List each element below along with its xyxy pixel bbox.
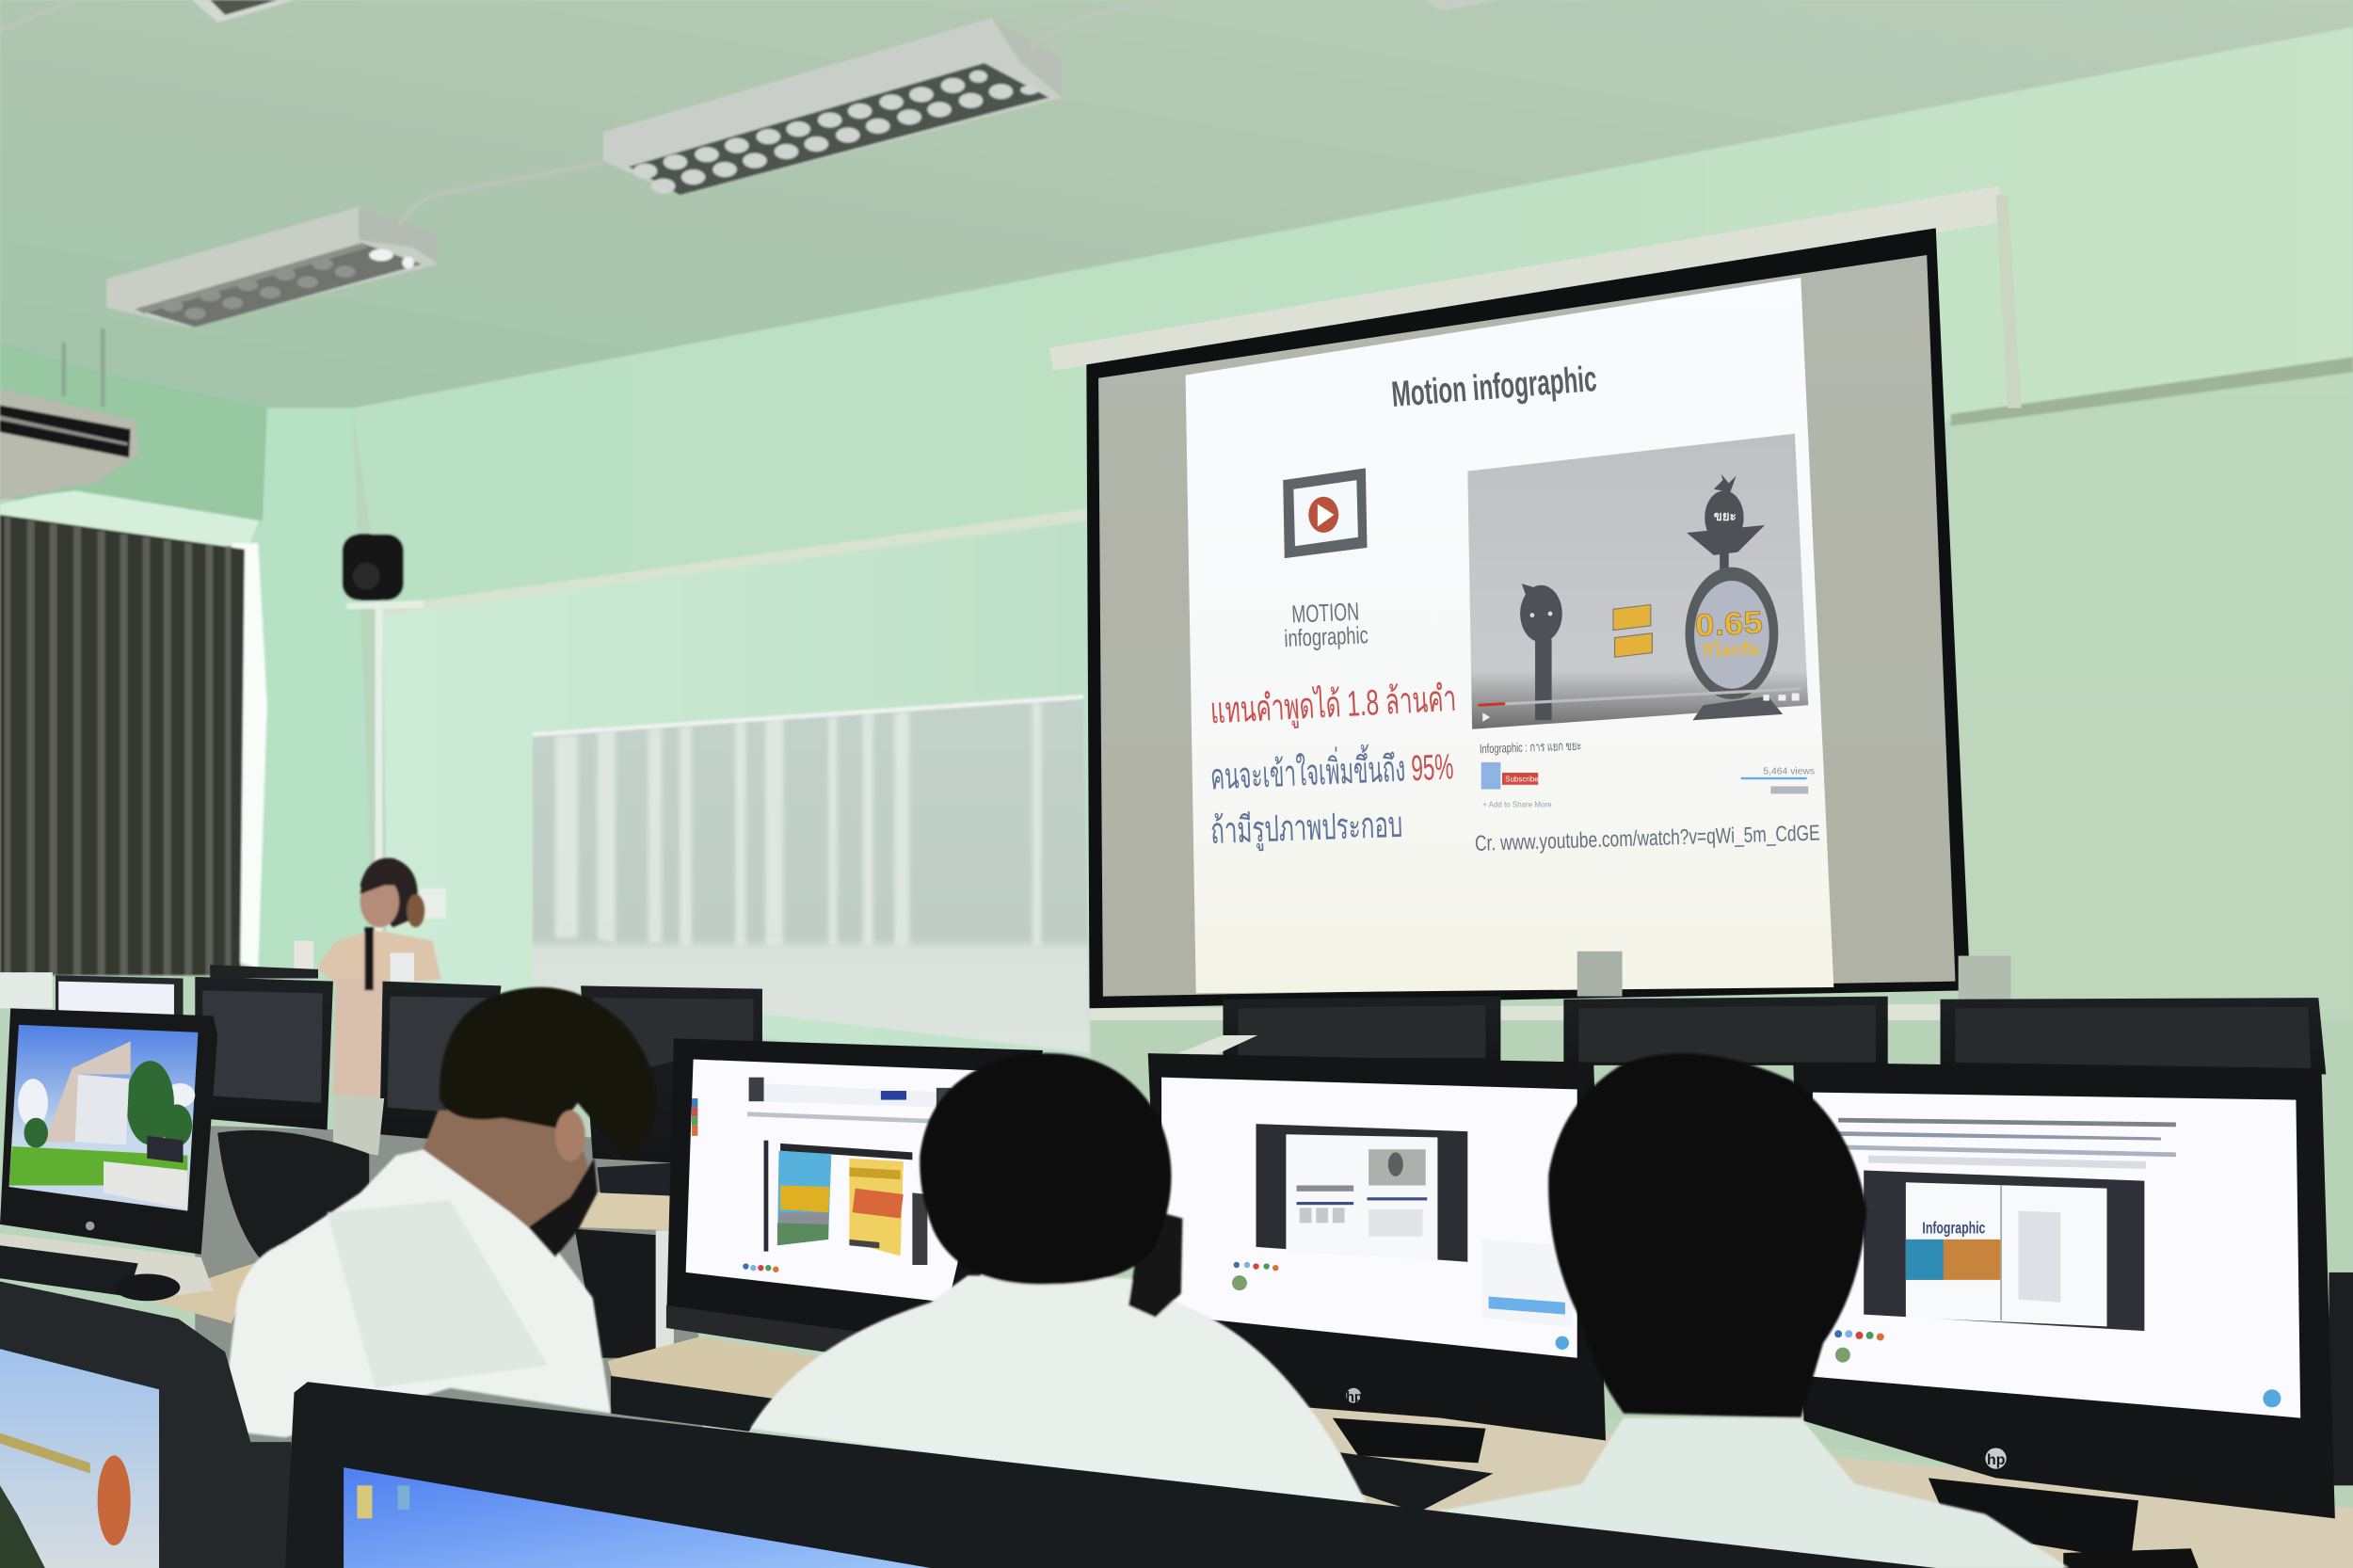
air conditioner (0, 328, 139, 500)
credit url: Cr. www.youtube.com/watch?v=qWi_5m_CdGE (1475, 820, 1820, 856)
speaker (343, 535, 424, 609)
scale with bag: 0.65 (1694, 605, 1764, 644)
video meta: 5,464 views (1763, 767, 1815, 777)
projector screen (1048, 186, 2318, 1020)
motion label: MOTION (1291, 598, 1360, 629)
thai text line 3: ถ้ามีรูปภาพประกอบ (1209, 805, 1403, 853)
monitor centre right (1148, 1053, 1606, 1440)
name card (391, 952, 414, 982)
curtain (0, 515, 245, 975)
student right (1418, 1053, 2070, 1568)
lower right wall (1951, 363, 2353, 1515)
video meta: Infographic : การ แยก ขยะ (1480, 739, 1582, 756)
motion label: infographic (1284, 622, 1369, 652)
screen housing (1048, 186, 2005, 371)
ceiling (0, 0, 2353, 408)
motion label (1284, 598, 1369, 652)
icon: video play (1283, 468, 1367, 558)
desk centre (608, 1336, 820, 1426)
monitor centre right: hp (1346, 1390, 1363, 1405)
pale cabinet side (656, 1230, 674, 1351)
space under presenter (333, 1098, 384, 1156)
paper clips on screen bottom (1577, 952, 1623, 997)
lower front wall (383, 513, 1093, 1080)
hp logo 4 (1985, 1448, 2007, 1469)
hair (360, 858, 418, 927)
video meta: Subscribe (1505, 776, 1539, 784)
hair bun (407, 894, 424, 927)
keyboard centre (611, 1376, 773, 1432)
far row monitors (0, 965, 762, 1163)
bright window strip (232, 543, 267, 968)
wall rail right (1951, 357, 2353, 426)
monitor stand (1333, 1418, 1485, 1463)
microphone (364, 927, 374, 990)
jacket (316, 930, 441, 985)
shirt (750, 1275, 1371, 1514)
dark pc cabinet (575, 1229, 656, 1358)
student centre (750, 1053, 1371, 1514)
monitor far right (1793, 1063, 2335, 1518)
ear (555, 1111, 585, 1161)
video thumbnail (1467, 434, 1808, 729)
monitor centre left (666, 1038, 1043, 1355)
left desk (146, 1262, 258, 1323)
far keyboard (598, 1163, 674, 1196)
dress (333, 980, 384, 1098)
video meta: + Add to Share More (1482, 801, 1552, 809)
thai text line 2: คนจะเข้าใจเพิ่มขึ้นถึง 95% (1209, 740, 1454, 798)
slide title: Motion infographic (1390, 359, 1598, 415)
shirt (1418, 1418, 2070, 1568)
desk segment rear (579, 1192, 674, 1230)
hair (440, 987, 655, 1159)
ceiling light centre (603, 18, 1063, 195)
video meta (1480, 739, 1815, 809)
presenter (316, 858, 441, 1098)
scale with bag (1685, 474, 1783, 720)
skin and mask (1128, 1208, 1182, 1318)
scale with bag: ขยะ (1714, 509, 1737, 524)
infographic heading on monitor: Infographic (1922, 1218, 1986, 1237)
keyboard left (0, 1245, 138, 1296)
column (248, 408, 376, 983)
left wall above curtain (0, 342, 270, 520)
whiteboard (533, 695, 1090, 1053)
front monitor left (0, 1281, 291, 1568)
lower room fill (195, 1020, 2353, 1568)
hp logo 3 (1346, 1388, 1361, 1403)
wall conduit vertical (376, 606, 383, 982)
keyboard far right (2063, 1548, 2199, 1568)
ceiling fixture stubs (192, 0, 1500, 23)
front monitor centre (285, 1382, 1936, 1568)
hair (920, 1053, 1171, 1285)
thai text line 1: แทนคำพูดได้ 1.8 ล้านคำ (1209, 678, 1457, 732)
ceiling conduit (0, 0, 1201, 225)
back row monitors (1178, 997, 2326, 1074)
mouse (114, 1274, 180, 1301)
keyboard right (1340, 1452, 1493, 1512)
equals sign (1613, 604, 1652, 657)
hair (1548, 1053, 1866, 1418)
wall rail left (383, 508, 1086, 616)
red mark card (294, 941, 313, 972)
face (360, 876, 399, 927)
stick figure (1520, 584, 1562, 720)
student left (228, 987, 655, 1437)
player bar (1478, 687, 1801, 707)
scale with bag: กิโลกรัม (1702, 638, 1760, 661)
screen grey (1098, 255, 1955, 997)
screen frame (1086, 228, 1970, 1008)
bottom wall rail (1090, 1002, 2318, 1020)
upper front wall (353, 27, 2353, 612)
monitor left with campus wallpaper (0, 1008, 217, 1255)
neck (424, 1111, 594, 1227)
mask (528, 1159, 598, 1257)
pale strip above curtain (0, 490, 260, 549)
chair (217, 1130, 369, 1263)
monitor far right: hp (1987, 1452, 2006, 1468)
slide (1186, 278, 1833, 993)
ceiling light left (106, 207, 439, 328)
wall thermostat (420, 888, 446, 919)
monitor stand right (1929, 1478, 2138, 1560)
shirt (228, 1149, 611, 1437)
